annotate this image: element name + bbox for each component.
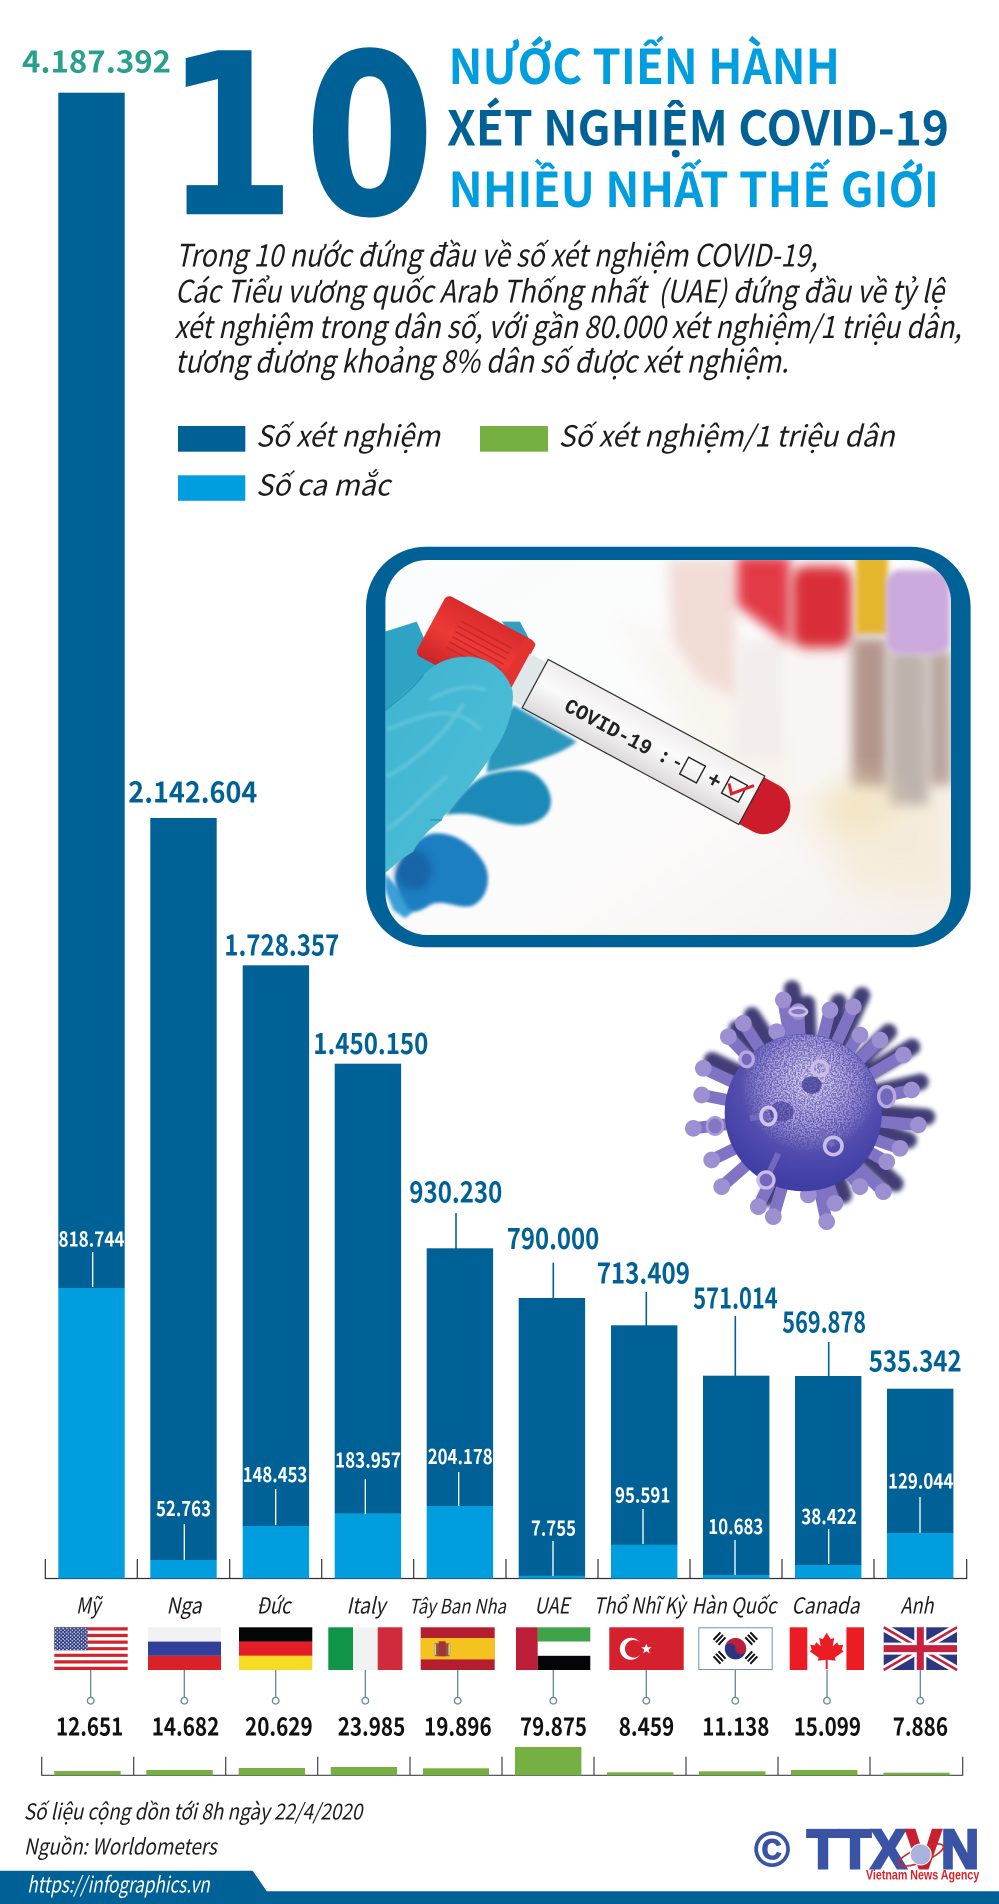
bars: Anh: 129.044: [888, 1465, 953, 1495]
flag: USA: [54, 1627, 128, 1670]
flag: UAE: [516, 1627, 590, 1670]
bars: Hàn Quốc: 10.683: [708, 1511, 763, 1541]
flag: Canada: [790, 1627, 864, 1670]
copyright mark and TTXVN logo: [754, 1818, 979, 1882]
bars: Đức: 1.728.357: [224, 923, 339, 965]
big number 10: 10: [164, 6, 435, 268]
test tube: [415, 594, 805, 847]
tests per million values: 15.099: [794, 1708, 861, 1744]
bars: Canada: 569.878: [782, 1300, 866, 1342]
intro paragraph: Trong 10 nước đứng đầu về số xét nghiệm COVID-19,: [176, 231, 818, 276]
bars: UAE: 790.000: [507, 1216, 599, 1258]
country names: Nga: [166, 1588, 203, 1620]
bars: Italy: 1.450.150: [313, 1021, 428, 1063]
bars: Nga: 2.142.604: [128, 769, 257, 811]
bars: UAE: 7.755: [531, 1512, 576, 1542]
legend: tests: Số xét nghiệm: [256, 414, 441, 456]
flag: Germany: [239, 1627, 312, 1670]
bars: Mỹ: [22, 38, 171, 1579]
title line 2: XÉT NGHIỆM COVID-19: [447, 90, 949, 160]
data note: Số liệu cộng dồn tới 8h ngày 22/4/2020: [24, 1794, 365, 1826]
test tube: :: [656, 740, 675, 769]
bars: Nga: [128, 769, 257, 1578]
bars: Canada: [782, 1300, 866, 1578]
country names: Đức: [256, 1588, 293, 1620]
tests per million values: 7.886: [893, 1708, 948, 1744]
source note: Nguồn: Worldometers: [24, 1829, 218, 1861]
tube label text: COVID-19: [560, 696, 655, 762]
legend: tests per million: Số xét nghiệm/1 triệu dân: [558, 414, 896, 456]
flag: Spain: [421, 1627, 495, 1670]
tests per million values: 8.459: [619, 1708, 674, 1744]
test tube: +: [702, 762, 728, 796]
flag: UK: [884, 1627, 957, 1670]
bars: Anh: 535.342: [869, 1339, 962, 1381]
glove behind tube: [385, 622, 531, 713]
legend: cases: Số ca mắc: [256, 463, 393, 505]
country names: Mỹ: [76, 1588, 103, 1620]
logo globe: [896, 1840, 946, 1870]
virus illustration: [693, 989, 927, 1222]
country names: UAE: [534, 1588, 572, 1620]
footer band: [0, 1868, 999, 1904]
legend: tests: [178, 414, 441, 456]
bars: Hàn Quốc: [693, 1275, 778, 1578]
bars: Đức: [224, 923, 339, 1578]
flag: South Korea: [699, 1628, 772, 1670]
bars: Đức: 148.453: [243, 1459, 307, 1489]
country names: Tây Ban Nha: [409, 1590, 507, 1619]
virus spikes: [693, 1000, 918, 1222]
bars: UAE: [507, 1216, 599, 1578]
photo panel: test tube: [366, 547, 971, 947]
glove fingers: [385, 657, 577, 918]
country names: [76, 1588, 935, 1620]
country names: Canada: [792, 1588, 861, 1620]
green bar chart: tests per million: [42, 1747, 963, 1775]
flag: Turkey: [609, 1627, 684, 1670]
tests per million values: 12.651: [56, 1708, 123, 1744]
flag: Italy: [328, 1627, 402, 1670]
intro paragraph: [174, 231, 962, 382]
flag connectors: [87, 1670, 924, 1704]
bars: Thổ Nhĩ Kỳ: 95.591: [615, 1480, 670, 1510]
bars: Tây Ban Nha: 204.178: [428, 1441, 493, 1471]
bars: Tây Ban Nha: 930.230: [409, 1170, 502, 1212]
flags: [54, 1627, 957, 1670]
tests per million values: 19.896: [424, 1708, 492, 1744]
bars: Hàn Quốc: 571.014: [693, 1275, 778, 1317]
flag: Russia: [148, 1627, 221, 1670]
title line 3: NHIỀU NHẤT THẾ GIỚI: [448, 151, 939, 221]
bars: Italy: 183.957: [335, 1444, 401, 1474]
bar chart: tests and cases: [22, 38, 967, 1579]
bars: Italy: [313, 1021, 428, 1578]
tests per million values: 20.629: [245, 1708, 313, 1744]
bars: Nga: 52.763: [156, 1493, 211, 1523]
bars: Thổ Nhĩ Kỳ: [597, 1250, 690, 1578]
legend: [178, 414, 896, 505]
tests per million values: 14.682: [152, 1708, 219, 1744]
country names: Italy: [346, 1588, 389, 1620]
bars: Canada: 38.422: [801, 1501, 857, 1531]
bars: Thổ Nhĩ Kỳ: 713.409: [597, 1250, 690, 1292]
bars: Anh: [869, 1339, 962, 1578]
title: [164, 6, 949, 268]
tests per million values: 23.985: [338, 1708, 405, 1744]
tests per million values: 11.138: [702, 1708, 769, 1744]
test tube: -: [669, 746, 689, 775]
footer band: https://infographics.vn: [27, 1868, 211, 1900]
title line 1: NƯỚC TIẾN HÀNH: [448, 28, 840, 98]
tests per million values: [56, 1708, 948, 1744]
bars: Tây Ban Nha: [409, 1170, 502, 1578]
country names: Thổ Nhĩ Kỳ: [594, 1588, 688, 1620]
bars: Mỹ: 4.187.392: [22, 38, 171, 82]
chart axis: [45, 1559, 967, 1578]
copyright symbol: ©: [754, 1823, 790, 1877]
intro paragraph: tương đương khoảng 8% dân số được xét nghiệm.: [175, 337, 788, 382]
bars: Mỹ: 818.744: [58, 1224, 124, 1254]
tests per million values: 79.875: [520, 1708, 587, 1744]
country names: Anh: [900, 1588, 935, 1620]
country names: Hàn Quốc: [692, 1588, 779, 1620]
TTXVN wordmark: TTXVN: [807, 1818, 979, 1880]
legend: cases: [178, 463, 393, 505]
